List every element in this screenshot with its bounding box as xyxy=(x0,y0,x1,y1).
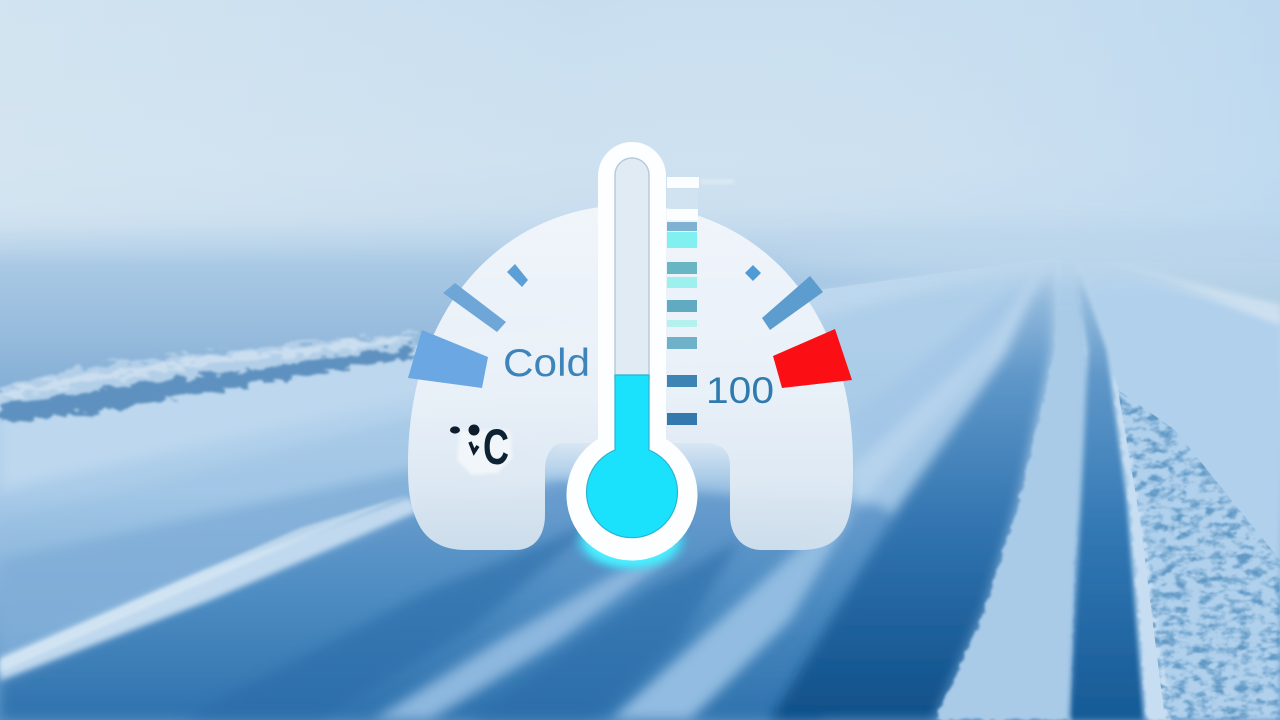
gauge body xyxy=(408,205,853,550)
icon: degrees Celsius mark xyxy=(450,419,509,475)
icon: degrees Celsius mark: C xyxy=(483,419,509,475)
far ridge on the right xyxy=(1090,255,1280,325)
left road streaks xyxy=(0,262,1040,720)
soft fade at top of the notch xyxy=(545,443,730,483)
thin bright line inside streak xyxy=(0,495,408,672)
glass tube xyxy=(615,158,649,380)
pale streaks right of gauge xyxy=(850,265,1045,505)
label: Cold: Cold xyxy=(503,342,590,385)
gritty frozen shoulder xyxy=(1118,390,1280,720)
tick: medium right xyxy=(762,276,823,330)
lower left pale streak xyxy=(373,550,680,720)
tick: small left xyxy=(507,264,528,287)
label: 100: 100 xyxy=(706,370,774,411)
centre snow strip xyxy=(935,262,1090,720)
tick: medium left xyxy=(443,283,506,332)
dark tyre track right xyxy=(1070,262,1145,720)
thermometer white case xyxy=(566,142,698,560)
mercury column and bulb xyxy=(586,375,678,538)
background: snowy ground xyxy=(0,258,1280,720)
thermometer xyxy=(566,142,734,560)
icon: degrees patch xyxy=(457,430,512,475)
background: sea on the left xyxy=(0,265,1000,395)
background: far field on the right xyxy=(1060,262,1280,305)
right snow shoulder xyxy=(1078,258,1280,720)
tick: small right xyxy=(745,265,761,281)
gauge panel xyxy=(408,205,853,550)
white road marking streak xyxy=(0,498,420,680)
shoulder edge strip xyxy=(1112,370,1172,720)
scale ticks xyxy=(667,177,734,425)
horizon fog over road xyxy=(760,231,1280,279)
lower middle pale streak xyxy=(610,500,860,720)
hot zone wedge xyxy=(773,329,852,388)
snowbank at roadside xyxy=(0,333,415,424)
background: sky xyxy=(0,0,1280,272)
cold zone wedge xyxy=(408,330,488,388)
dark tyre track left xyxy=(770,262,1058,720)
darker lower left shadow bands xyxy=(180,520,740,720)
glow under thermometer bulb xyxy=(573,509,689,573)
